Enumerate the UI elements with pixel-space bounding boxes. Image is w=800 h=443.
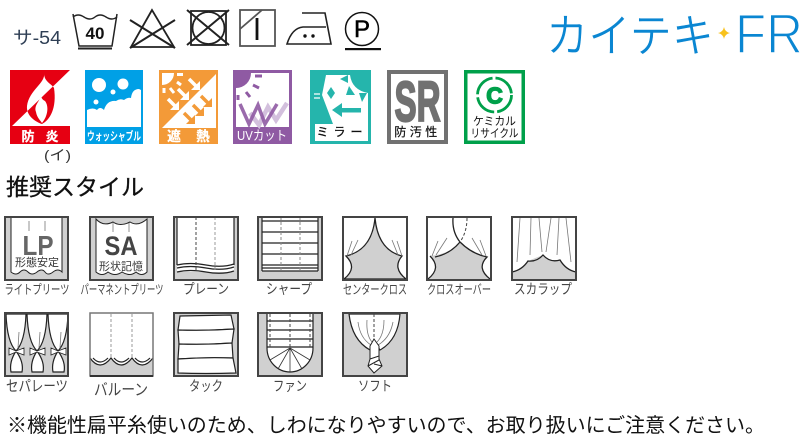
style: light pleat: LP <box>22 230 54 261</box>
style: cross over: クロスオーバー <box>427 282 491 297</box>
style: separate <box>5 313 68 395</box>
style: light pleat: 形態安定 <box>15 256 59 269</box>
badge: stain resistant SR: SR <box>394 70 440 134</box>
badge: washable <box>85 70 143 144</box>
badge: mirror: ミラー <box>316 125 368 139</box>
style: light pleat <box>4 217 70 297</box>
style: sharp: シャープ <box>266 281 312 297</box>
badge: chemical recycle: C <box>486 82 503 108</box>
style: balloon: バルーン <box>94 382 148 399</box>
logo: カイテキ FR <box>551 15 800 54</box>
style: fan: ファン <box>273 378 307 394</box>
badge: UV cut <box>233 70 292 144</box>
style: permanent pleat: SA <box>104 231 138 261</box>
style: cross over <box>427 217 491 297</box>
footer note: ※機能性扁平糸使いのため、しわになりやすいので、お取り扱いにご注意ください。 <box>7 414 765 437</box>
badge: fire retardant <box>10 70 70 144</box>
icon: yellow sparkle <box>718 27 730 39</box>
badge: chemical recycle: リサイクル <box>470 127 518 140</box>
style: permanent pleat <box>80 217 164 297</box>
badge: washable: ウォッシャブル <box>87 129 141 143</box>
icon: wash 40 <box>73 14 117 50</box>
icon: dry clean P <box>345 12 381 50</box>
care symbols <box>73 10 381 50</box>
style: fan <box>258 313 322 394</box>
badge: stain resistant SR: 防汚性 <box>394 124 441 139</box>
badge: fire retardant: 炎 <box>45 129 59 144</box>
style: soft <box>343 313 407 394</box>
badge: heat shielding: 遮 <box>167 128 181 144</box>
note: (イ): (イ) <box>44 147 71 163</box>
badge: heat shielding: 熱 <box>196 128 210 144</box>
icon: dry in shade <box>240 10 275 46</box>
icon: no tumble dry <box>187 10 229 45</box>
style: scallop: スカラップ <box>514 281 572 297</box>
logo: カイテキ FR: カイテキ <box>546 10 714 62</box>
badge: chemical recycle: ケミカル <box>473 115 516 128</box>
style: center cross <box>343 217 407 297</box>
style: center cross: センタークロス <box>343 282 407 297</box>
badge: mirror <box>310 70 371 144</box>
badge: fire retardant: 防 <box>21 129 35 144</box>
style: sharp <box>258 217 322 297</box>
style: scallop <box>512 217 576 297</box>
badge: chemical recycle <box>464 70 525 144</box>
style: permanent pleat: 形状記憶 <box>99 259 143 273</box>
badge: stain resistant SR <box>387 70 448 144</box>
style: plain <box>174 217 238 297</box>
badge: UV cut: UVカット <box>237 128 287 143</box>
style: light pleat: ライトプリーツ <box>4 282 70 297</box>
style: tuck <box>174 313 238 394</box>
icon: dry clean P: P <box>354 16 370 43</box>
style: separate: セパレーツ <box>6 378 68 395</box>
style: tuck: タック <box>189 378 223 394</box>
icon: wash 40: 40 <box>86 24 104 43</box>
icon: no bleach <box>130 10 175 48</box>
icon: iron <box>287 13 331 44</box>
badge: heat shielding <box>159 70 218 144</box>
style: permanent pleat: パーマネントプリーツ <box>80 282 164 297</box>
style: soft: ソフト <box>358 378 392 394</box>
product code: サ-54 <box>13 28 61 48</box>
style: balloon <box>90 313 153 399</box>
heading: recommended styles: 推奨スタイル <box>6 174 144 200</box>
style: plain: プレーン <box>183 281 229 297</box>
